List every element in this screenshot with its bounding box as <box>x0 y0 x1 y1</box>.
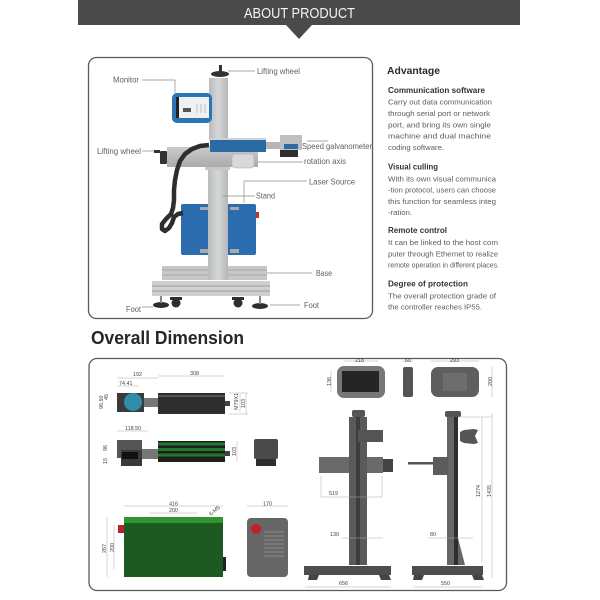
remote control: Remote control <box>388 225 447 235</box>
stand side view: 550 <box>441 581 450 587</box>
communication software: port, and bring its own single <box>388 120 491 130</box>
galvanometer top view: 96.50 <box>99 396 105 409</box>
communication software: coding software. <box>388 143 444 152</box>
laser source front view: 6-M5 <box>208 505 222 518</box>
remote control: puter through Ethernet to realize <box>388 250 498 258</box>
galvanometer side view: 103 <box>232 447 238 456</box>
communication software <box>388 85 492 152</box>
stand front view <box>304 410 393 587</box>
speed galvanometer <box>280 135 302 157</box>
machine illustration <box>152 65 302 309</box>
horizontal beam <box>167 147 258 167</box>
label: speed galvanometer: Speed galvanometer <box>302 142 372 151</box>
laser source side view <box>247 502 288 577</box>
monitor front view <box>327 358 385 398</box>
galvanometer side view: 15 <box>103 458 109 464</box>
arm connector <box>266 142 281 149</box>
galvanometer side view <box>103 426 238 466</box>
label: laser source <box>244 178 355 203</box>
stand side view <box>408 411 493 587</box>
upper column <box>209 78 228 140</box>
label: rotation axis: rotation axis <box>304 157 346 166</box>
laser source front view: 200 <box>169 508 178 514</box>
monitor front view: 218 <box>355 358 364 364</box>
label: top lifting wheel: Lifting wheel <box>257 67 300 76</box>
monitor side view: 60 <box>405 358 411 364</box>
galvanometer top view: 45 <box>104 394 110 400</box>
header banner <box>78 0 520 39</box>
degree of protection: The overall protection grade of <box>388 292 497 300</box>
galvanometer top view: 74.41 <box>119 381 132 387</box>
side handle <box>154 150 167 164</box>
visual culling: Visual culling <box>388 162 438 172</box>
galvanometer top view: 308 <box>190 371 199 377</box>
overall dimension heading: Overall Dimension <box>91 327 244 348</box>
remote control: It can be linked to the host com <box>388 238 498 247</box>
stand <box>205 167 230 280</box>
monitor back view <box>431 358 494 397</box>
visual culling: this function for seamless integ <box>388 197 496 206</box>
degree of protection: Degree of protection <box>388 278 468 288</box>
monitor back view: 200 <box>488 377 494 386</box>
communication software: machine and dual machine <box>388 132 491 140</box>
header title: ABOUT PRODUCT <box>244 6 355 22</box>
stand front view: 519 <box>329 491 338 497</box>
laser source box <box>181 204 259 255</box>
feet and casters <box>153 296 268 309</box>
base <box>152 266 270 296</box>
stand front view: 656 <box>339 581 348 587</box>
label: stand: Stand <box>256 192 275 200</box>
visual culling <box>388 162 497 217</box>
visual culling: -tion protocol, users can choose <box>388 186 496 194</box>
label: monitor: Monitor <box>113 76 139 84</box>
laser source front view: 416 <box>169 502 178 508</box>
stand front view: 130 <box>330 532 339 538</box>
remote control: remote operation in different places. <box>388 260 499 270</box>
label: laser source: Laser Source <box>309 178 355 186</box>
label: right foot: Foot <box>304 301 320 310</box>
degree of protection <box>388 278 497 312</box>
galvanometer top view: M79X1 <box>234 393 240 410</box>
visual culling: -ration. <box>388 208 412 217</box>
label: stand <box>223 192 275 200</box>
cable <box>162 145 209 231</box>
communication software: through serial port or network <box>388 109 490 118</box>
label: left foot <box>126 305 153 314</box>
monitor side view <box>403 358 413 397</box>
monitor back view: 293 <box>450 358 459 364</box>
galvanometer top view: 192 <box>133 372 142 378</box>
laser source front view: 200 <box>110 543 116 552</box>
stand side view: 80 <box>430 532 436 538</box>
label: left foot: Foot <box>126 305 142 314</box>
galvanometer top view: 103 <box>241 399 247 408</box>
communication software: Carry out data communication <box>388 98 492 106</box>
stand side view: 1435 <box>487 485 493 497</box>
galvanometer side view: 118.50 <box>125 426 141 432</box>
monitor front view: 136 <box>327 377 333 386</box>
panel: overall dimension drawings <box>89 358 506 590</box>
laser source side view: 170 <box>263 502 272 508</box>
label: monitor <box>113 76 175 93</box>
label: base: Base <box>316 269 332 278</box>
monitor <box>172 93 212 123</box>
laser head <box>210 138 266 152</box>
galvanometer end view <box>254 439 278 466</box>
rotation axis plate <box>232 154 254 168</box>
label: right foot <box>270 301 320 310</box>
label: rotation axis <box>258 157 346 166</box>
laser source front view <box>102 502 226 577</box>
laser source front view: 267 <box>102 544 108 553</box>
top lifting wheel <box>211 65 229 77</box>
remote control <box>388 225 499 270</box>
advantage heading: Advantage <box>387 65 440 77</box>
panel: advantage text <box>387 65 499 312</box>
communication software: Communication software <box>388 85 485 95</box>
galvanometer side view: 96 <box>103 445 109 451</box>
panel: product diagram <box>88 58 372 318</box>
galvanometer top view <box>99 371 248 414</box>
stand side view: 1274 <box>476 485 482 497</box>
degree of protection: the controller reaches IP55. <box>388 302 482 312</box>
label: base <box>267 269 332 278</box>
label: top lifting wheel <box>228 67 300 76</box>
label: side lifting wheel: Lifting wheel <box>97 147 141 156</box>
visual culling: With its own visual communica <box>388 174 497 184</box>
